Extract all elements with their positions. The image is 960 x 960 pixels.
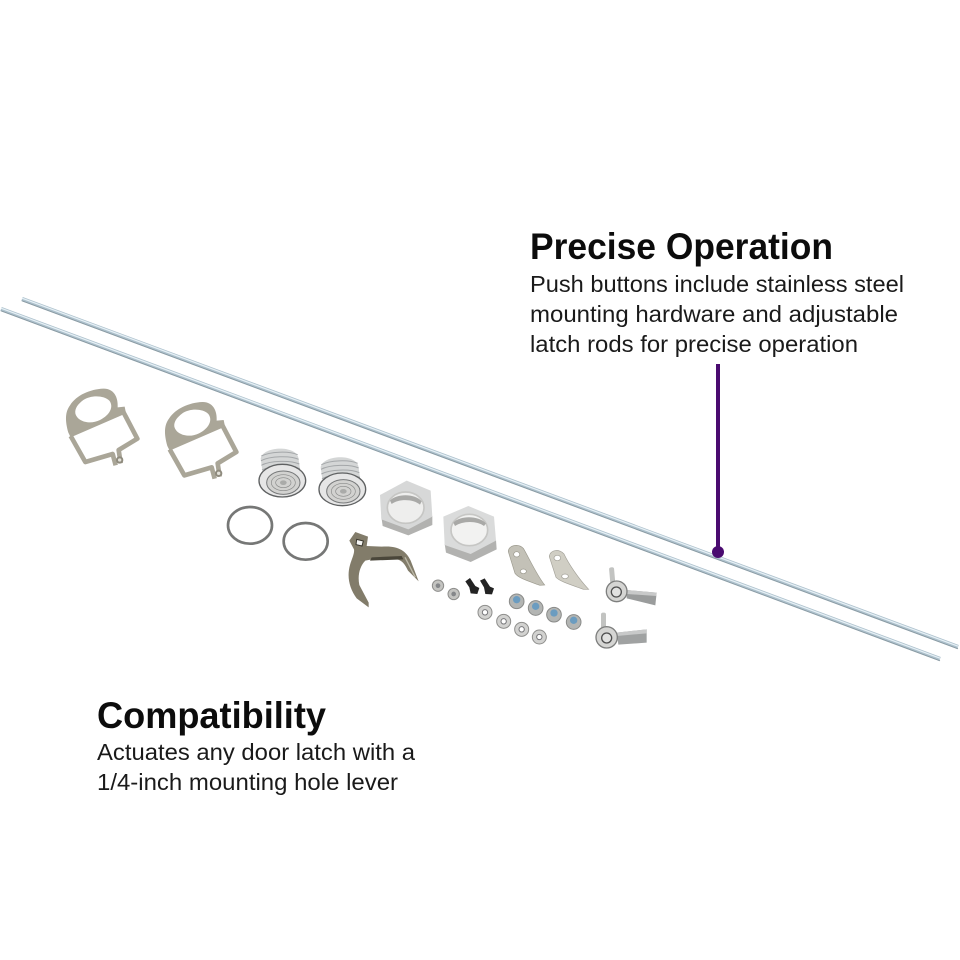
latch tab 2 bbox=[549, 551, 589, 589]
small nuts bbox=[432, 580, 546, 644]
right hardware group bbox=[349, 481, 657, 648]
latch fork lever bbox=[349, 532, 419, 607]
lower rod bbox=[1, 308, 940, 661]
blue lock nuts bbox=[509, 594, 581, 629]
washer 2 bbox=[284, 523, 328, 560]
text: compatibility description: 1/4-inch mounting hole lever bbox=[97, 769, 398, 795]
mounting bracket 1 bbox=[66, 389, 137, 465]
text: compatibility description: Actuates any door latch with a bbox=[97, 739, 415, 765]
threaded rods bbox=[1, 298, 958, 661]
large hex nut 1 bbox=[380, 481, 432, 535]
callout pointer line with dot bbox=[712, 364, 724, 558]
latch tab 1 bbox=[508, 545, 545, 585]
heading: Precise Operation: Precise Operation bbox=[530, 226, 833, 267]
rod end 1 bbox=[606, 567, 657, 605]
black screws bbox=[465, 578, 494, 594]
large hex nut 2 bbox=[443, 506, 497, 562]
callout: compatibility bbox=[97, 695, 415, 795]
washer 1 bbox=[228, 507, 272, 544]
text: precise operation description bbox=[530, 271, 904, 357]
text: precise operation description: latch rods for precise operation bbox=[530, 331, 858, 357]
push button 2 bbox=[319, 457, 366, 506]
rod end 2 bbox=[596, 613, 647, 648]
push button 1 bbox=[259, 449, 306, 497]
text: precise operation description: Push buttons include stainless steel bbox=[530, 271, 904, 297]
text: compatibility description bbox=[97, 739, 415, 795]
text: precise operation description: mounting hardware and adjustable bbox=[530, 301, 898, 327]
left hardware group bbox=[66, 389, 366, 560]
upper rod bbox=[22, 298, 958, 649]
heading: Compatibility: Compatibility bbox=[97, 695, 326, 736]
mounting bracket 2 bbox=[165, 402, 236, 479]
callout: precise operation bbox=[530, 226, 904, 558]
